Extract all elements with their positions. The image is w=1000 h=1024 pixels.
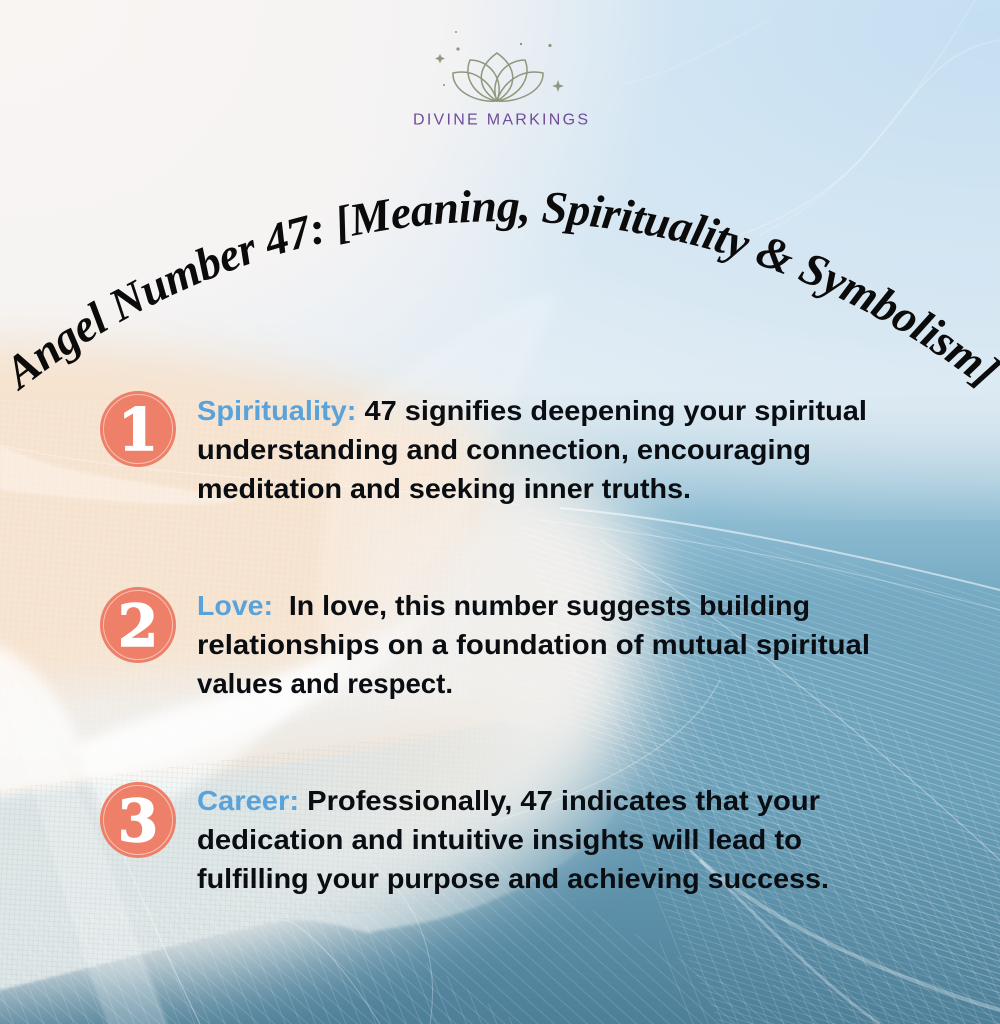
text: Spirituality: Spirituality: 47 signifies deepening your spiritual [197, 395, 867, 426]
text: Love: Love: In love, this number suggests building [197, 590, 810, 621]
item 3: Career [100, 782, 829, 894]
bottom left sheet [0, 720, 640, 992]
icon: number 3 badge [100, 782, 176, 858]
logo: Divine Markings lotus [413, 31, 588, 128]
item 2: Love: values and respect. [197, 668, 453, 699]
item 3: Career: dedication and intuitive insights will lead to [197, 824, 802, 855]
pale warm centre fading into blue [0, 440, 648, 1000]
mesh layers [0, 400, 470, 760]
white ribbons [0, 600, 440, 800]
icon: number 2 badge: 2 [118, 592, 158, 660]
item 1: Spirituality [100, 391, 867, 504]
icon: number 3 badge: 3 [118, 787, 158, 855]
icon: number 1 badge [100, 391, 176, 467]
text: Career: Career: Professionally, 47 indicates that your [197, 785, 820, 816]
item 3: Career: fulfilling your purpose and achieving success. [197, 863, 829, 894]
item 1: Spirituality: understanding and connection, encouraging [197, 434, 811, 465]
icon: sparkle stars [435, 31, 564, 92]
icon: lotus flower [453, 53, 543, 101]
item 2: Love: relationships on a foundation of mutual spiritual [197, 629, 870, 660]
logo wordmark: DIVINE MARKINGS [413, 112, 588, 128]
item 2: Love [100, 587, 870, 699]
icon: number 1 badge: 1 [118, 396, 158, 464]
title on arc: Angel Number 47: [Meaning, Spirituality & Symbolism] [14, 190, 1000, 392]
icon: number 2 badge [100, 587, 176, 663]
item 1: Spirituality: meditation and seeking inner truths. [197, 473, 691, 504]
